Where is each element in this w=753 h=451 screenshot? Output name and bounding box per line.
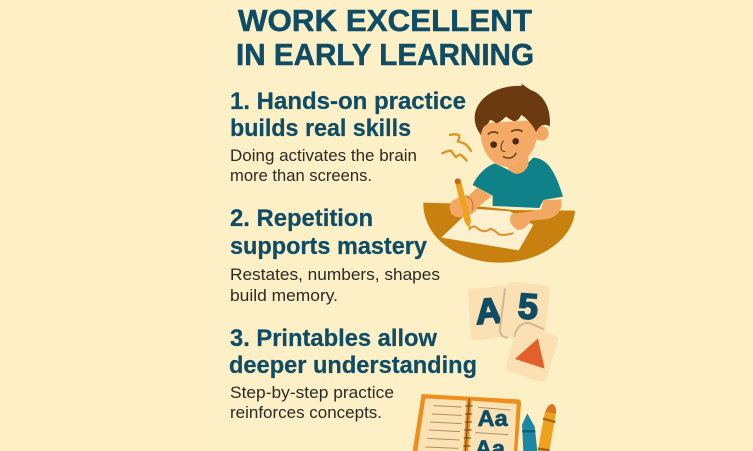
right arm and hand [510, 199, 562, 230]
icon: boy drawing at desk [423, 84, 575, 263]
heading: point 1: 1. Hands-on practice [230, 88, 466, 115]
icon: squiggle marks [442, 134, 471, 161]
icon: open notebook [413, 394, 521, 451]
heading: point 2: 2. Repetition [230, 205, 373, 232]
face [480, 120, 538, 167]
title [236, 3, 534, 72]
text: point 3 description: reinforces concepts. [230, 404, 382, 422]
text: point 1 description: more than screens. [230, 167, 372, 185]
heading: point 1: builds real skills [230, 115, 411, 142]
t-shirt [473, 158, 563, 208]
heading: point 3: 3. Printables allow [230, 325, 437, 352]
heading: point 2 [230, 205, 428, 260]
text: point 3 description: Step-by-step practice [230, 384, 394, 402]
icon: letter and shape cards: 5 [517, 285, 540, 327]
heading: point 3 [229, 325, 477, 379]
fingers over pencil [450, 202, 463, 216]
drawn squiggle [469, 227, 513, 235]
yellow crayon [538, 404, 556, 451]
icon: letter and shape cards: A [474, 289, 503, 332]
text: point 2 description: Restates, numbers, shapes [230, 266, 440, 284]
pencil [455, 179, 471, 229]
nose and smile [501, 141, 505, 152]
eyes [490, 141, 497, 148]
card: 5 [500, 282, 550, 338]
heading: point 1 [230, 88, 466, 142]
ear [534, 126, 549, 141]
icon: crayons [522, 404, 556, 451]
title: IN EARLY LEARNING [236, 37, 534, 72]
text: point 1 description [230, 147, 417, 185]
heading: point 3: deeper understanding [229, 352, 477, 379]
notebook spiral [463, 398, 473, 451]
left arm and hand [450, 187, 492, 217]
heading: point 2: supports mastery [230, 233, 428, 260]
icon: open notebook: Aa [478, 406, 508, 431]
text: point 3 description [230, 384, 394, 422]
text: point 1 description: Doing activates the brain [230, 147, 417, 165]
blue crayon [522, 413, 537, 451]
text: point 2 description: build memory. [230, 287, 338, 305]
card: A [468, 285, 509, 341]
text: point 2 description [230, 266, 440, 305]
icon: letter and shape cards [468, 282, 558, 382]
title: WORK EXCELLENT [238, 3, 532, 38]
paper [441, 209, 533, 250]
hair [475, 84, 550, 135]
neck [504, 157, 528, 174]
desk [423, 203, 575, 263]
card: triangle [506, 324, 558, 382]
